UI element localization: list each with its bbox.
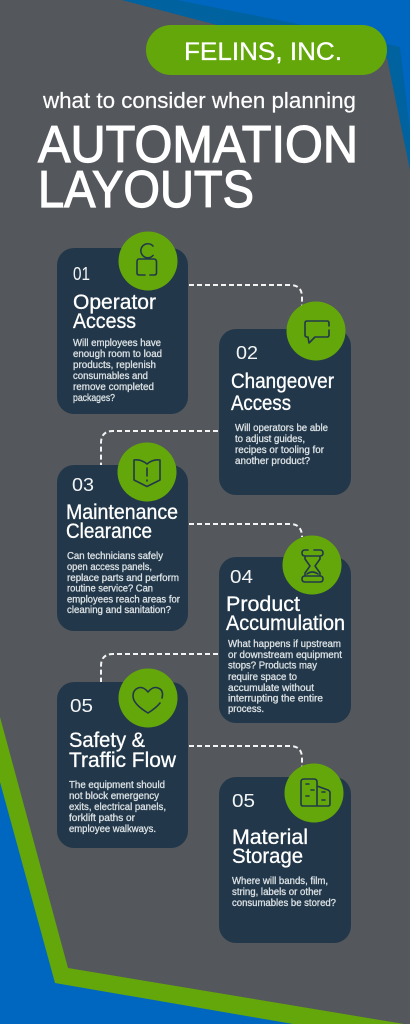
panel: 04 product accumulation: interrupting the entire	[228, 694, 324, 704]
connector: step 5 to 6	[189, 746, 302, 767]
top right corner: blue shapes	[122, 0, 410, 170]
panel: 05 material storage: Storage	[232, 845, 303, 868]
company name pill	[146, 25, 387, 75]
panel: 03 maintenance clearance	[57, 442, 188, 631]
panel: 04 product accumulation: process.	[228, 704, 264, 715]
panel: 03 maintenance clearance: cleaning and sanitation?	[67, 605, 172, 616]
panel: 02 changeover access: Will operators be able	[235, 423, 329, 434]
panel: 01 operator access: enough room to load	[73, 349, 162, 360]
main title	[38, 116, 358, 219]
panel: 05 safety and traffic flow: Traffic Flow	[69, 749, 177, 772]
panel: 05 material storage: consumables be stored?	[232, 898, 337, 909]
panel: 03 maintenance clearance: routine service? Can	[67, 584, 153, 594]
panel: 05 safety and traffic flow: Safety &	[69, 729, 145, 752]
panel: 05 safety and traffic flow: employee walkways.	[69, 824, 156, 835]
panel: 03 maintenance clearance: employees reach areas for	[67, 594, 181, 606]
panel: 01 operator access: 01	[73, 264, 90, 284]
main title: LAYOUTS	[38, 161, 254, 219]
connector: step 2 to 3	[101, 431, 218, 465]
panel: 05 safety and traffic flow: forklift paths or	[69, 813, 136, 824]
panel: 04 product accumulation: stops? Products may	[228, 660, 317, 672]
panel: 03 maintenance clearance: Can technicians safely	[67, 551, 163, 562]
panel: 04 product accumulation: accumulate without	[228, 683, 314, 694]
panel: 01 operator access: consumables and	[73, 371, 148, 382]
panel: 01 operator access: remove completed	[73, 382, 154, 393]
panel: 02 changeover access: Access	[231, 392, 291, 415]
panel: 03 maintenance clearance: Clearance	[66, 520, 152, 543]
connector: step 1 to 2	[189, 285, 302, 306]
panel: 03 maintenance clearance: 03	[72, 475, 94, 495]
panel: 05 material storage: Where will bands, film,	[232, 876, 328, 887]
connector: step 4 to 5	[101, 654, 218, 682]
panel: 05 material storage: Material	[232, 826, 308, 849]
panel: 05 safety and traffic flow	[57, 668, 188, 848]
panel: 01 operator access	[57, 232, 188, 414]
panel: 04 product accumulation: or downstream equipment	[228, 650, 342, 661]
icon: heart	[118, 668, 178, 728]
panel: 05 safety and traffic flow: not block emergency	[69, 791, 159, 802]
icon: storage buildings	[284, 764, 344, 822]
panel: 05 safety and traffic flow: The equipment should	[69, 780, 165, 791]
company name pill: FELINS, INC.	[184, 38, 342, 66]
panel: 03 maintenance clearance: replace parts and perform	[67, 573, 179, 584]
panel: 02 changeover access: 02	[236, 343, 258, 363]
panel: 05 material storage	[219, 764, 351, 943]
panel: 03 maintenance clearance: open access panels,	[67, 562, 152, 573]
connector: step 3 to 4	[189, 524, 302, 537]
panel: 04 product accumulation	[219, 536, 351, 723]
panel: 02 changeover access	[219, 302, 351, 495]
panel: 02 changeover access: recipes or tooling for	[235, 445, 325, 456]
panel: 04 product accumulation: Product	[226, 593, 300, 616]
panel: 04 product accumulation: require space to	[228, 672, 298, 683]
panel: 04 product accumulation: 04	[230, 567, 253, 587]
icon: hourglass	[282, 536, 342, 594]
panel: 01 operator access: products, replenish	[73, 360, 156, 371]
panel: 05 material storage: string, labels or other	[232, 887, 323, 898]
panel: 03 maintenance clearance: Maintenance	[66, 501, 178, 524]
panel: 04 product accumulation: Accumulation	[226, 612, 345, 635]
panel: 01 operator access: Access	[73, 310, 136, 333]
panel: 05 safety and traffic flow: exits, electrical panels,	[69, 802, 166, 813]
icon: operator person	[118, 232, 178, 290]
panel: 02 changeover access: Changeover	[231, 370, 334, 393]
panel: 02 changeover access: to adjust guides,	[235, 434, 305, 445]
panel: 02 changeover access: another product?	[235, 456, 311, 467]
panel: 05 safety and traffic flow: 05	[70, 696, 93, 716]
bottom left corner: green and blue shapes	[0, 717, 410, 1024]
panel: 05 material storage: 05	[232, 791, 255, 811]
icon: open book	[118, 442, 176, 502]
subtitle: what to consider when planning	[42, 88, 356, 113]
icon: speech bubble	[286, 302, 346, 360]
panel: 04 product accumulation: What happens if upstream	[228, 639, 341, 650]
main title: AUTOMATION	[38, 116, 358, 174]
panel: 01 operator access: packages?	[73, 393, 115, 404]
panel: 01 operator access: Operator	[73, 291, 156, 314]
panel: 01 operator access: Will employees have	[73, 338, 162, 349]
